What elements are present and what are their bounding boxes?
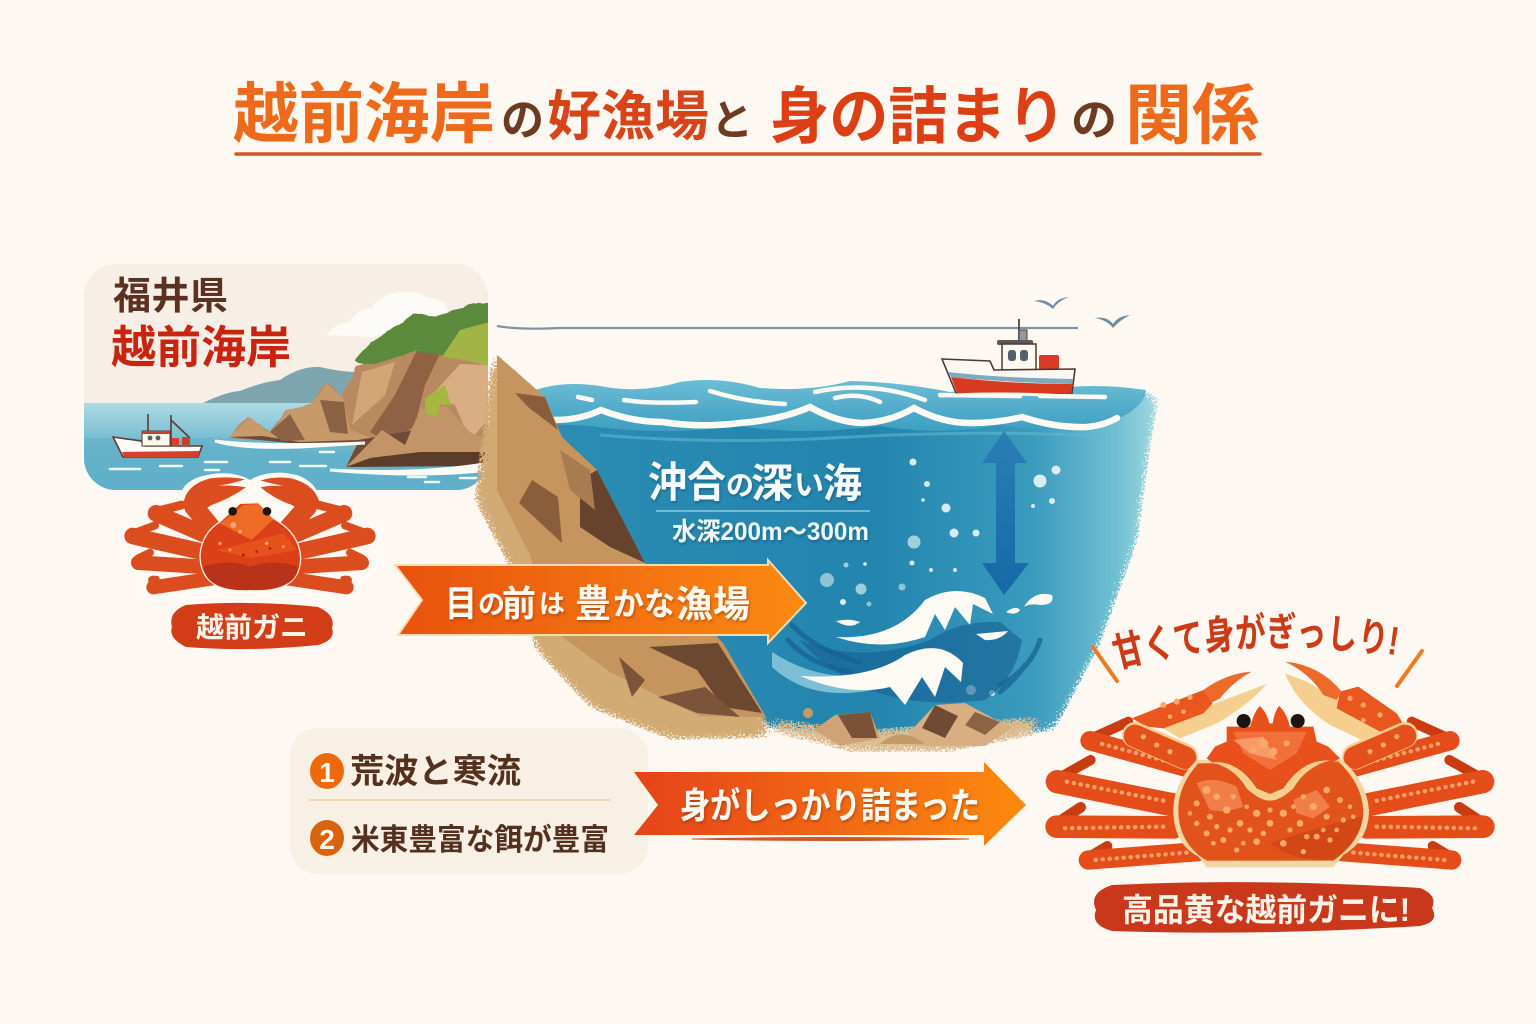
wave shadows — [800, 622, 1022, 702]
icon: fishing boat — [940, 319, 1075, 396]
title: 好漁場 — [547, 87, 709, 147]
label: premium Echizen crab — [1094, 882, 1434, 933]
eyes — [228, 507, 237, 516]
sea heading: 深 — [751, 462, 793, 506]
label: Echizen crab — [171, 603, 333, 649]
upper foam — [578, 388, 1105, 404]
arrow: rich fishing ground: 漁場 — [676, 584, 750, 625]
panel: reasons list — [290, 728, 648, 874]
underline under arrow — [692, 838, 969, 840]
sea heading: 沖合 — [648, 459, 726, 506]
callout: sweet and packed: 甘くて身がぎっしり! — [1112, 612, 1398, 670]
arrow: firm meat — [634, 762, 1026, 846]
title: の — [1071, 96, 1117, 145]
surface band — [530, 380, 1146, 431]
coast name text: 越前海岸 — [111, 322, 291, 373]
big waves — [772, 591, 1052, 705]
icon: depth double arrow — [982, 431, 1029, 595]
right legs — [1342, 722, 1483, 860]
divider under sea heading — [656, 510, 870, 512]
arrow: rich fishing ground: かな — [613, 586, 675, 622]
arrow: rich fishing ground: 前 — [502, 583, 536, 624]
claws — [183, 477, 246, 510]
distant mountains — [203, 367, 360, 404]
upper wave — [836, 591, 993, 644]
sea heading: の — [726, 470, 754, 501]
arrow: rich fishing ground: は — [539, 589, 565, 619]
left legs — [1057, 722, 1198, 860]
number badge 1 — [310, 753, 344, 789]
number badge 2 — [310, 820, 344, 856]
sea heading — [648, 459, 862, 506]
white outline — [120, 473, 380, 598]
right legs — [318, 505, 345, 512]
sea — [84, 403, 488, 493]
right claw — [1285, 662, 1405, 758]
number badge 1: 1 — [319, 757, 335, 788]
spray — [836, 594, 1052, 640]
fishing boat, small — [113, 414, 202, 457]
arrow: rich fishing ground — [395, 560, 806, 643]
arrow: rich fishing ground: 豊 — [575, 584, 611, 626]
reason 1 text: 荒波と寒流 — [350, 753, 521, 791]
title: 越前海岸 — [233, 77, 495, 151]
place name text: 福井県 — [113, 276, 228, 318]
small crab: Echizen crab — [120, 473, 380, 598]
title: と — [711, 97, 753, 144]
light green hill — [442, 322, 490, 366]
panel: Echizen coast scene — [84, 264, 490, 493]
carapace — [1173, 758, 1369, 867]
arrow: firm meat: 身がしっかり詰まった — [680, 785, 980, 826]
eyes — [1237, 714, 1251, 728]
title: の — [501, 96, 544, 145]
lower wave — [800, 648, 963, 705]
left legs — [155, 505, 182, 512]
arrow: rich fishing ground: の — [478, 590, 505, 620]
title: 関係 — [1125, 78, 1259, 152]
rocks — [803, 703, 1013, 746]
bubbles — [820, 458, 1060, 696]
arrow: rich fishing ground: 目 — [445, 583, 477, 624]
spark left — [1093, 647, 1117, 681]
number badge 2: 2 — [319, 824, 335, 855]
rocky cliffs — [229, 350, 488, 467]
carapace — [200, 503, 301, 591]
reason 2 text: 米東豊富な餌が豊富 — [351, 823, 609, 857]
title underline — [236, 153, 1260, 154]
green moss on rock — [425, 385, 451, 418]
sea body — [520, 392, 1160, 748]
icon: seagulls — [1034, 297, 1130, 328]
label: Echizen crab: 越前ガニ — [196, 612, 308, 643]
horizon line — [497, 326, 1078, 329]
arms — [194, 507, 212, 528]
spark right — [1397, 651, 1422, 686]
white wave crest — [554, 407, 1117, 427]
foam — [215, 441, 490, 474]
carapace head — [1207, 706, 1340, 785]
sea cross-section — [520, 380, 1160, 752]
reasons divider — [309, 799, 610, 801]
sea heading: い — [794, 469, 824, 502]
title: 身の詰まり — [770, 83, 1066, 152]
sea heading: 海 — [823, 462, 862, 506]
shell bumps — [1141, 695, 1399, 854]
depth text: 水深200m～300m — [672, 518, 869, 546]
sand under rocks — [760, 716, 1042, 752]
left claw — [1132, 672, 1267, 758]
green hill top — [355, 303, 490, 365]
label: premium Echizen crab: 高品黄な越前ガニに! — [1122, 892, 1410, 928]
title — [233, 77, 1260, 154]
large crab — [1057, 662, 1483, 867]
cliff — [474, 350, 775, 740]
cloud — [327, 292, 448, 337]
depth shading lines — [600, 433, 1100, 441]
